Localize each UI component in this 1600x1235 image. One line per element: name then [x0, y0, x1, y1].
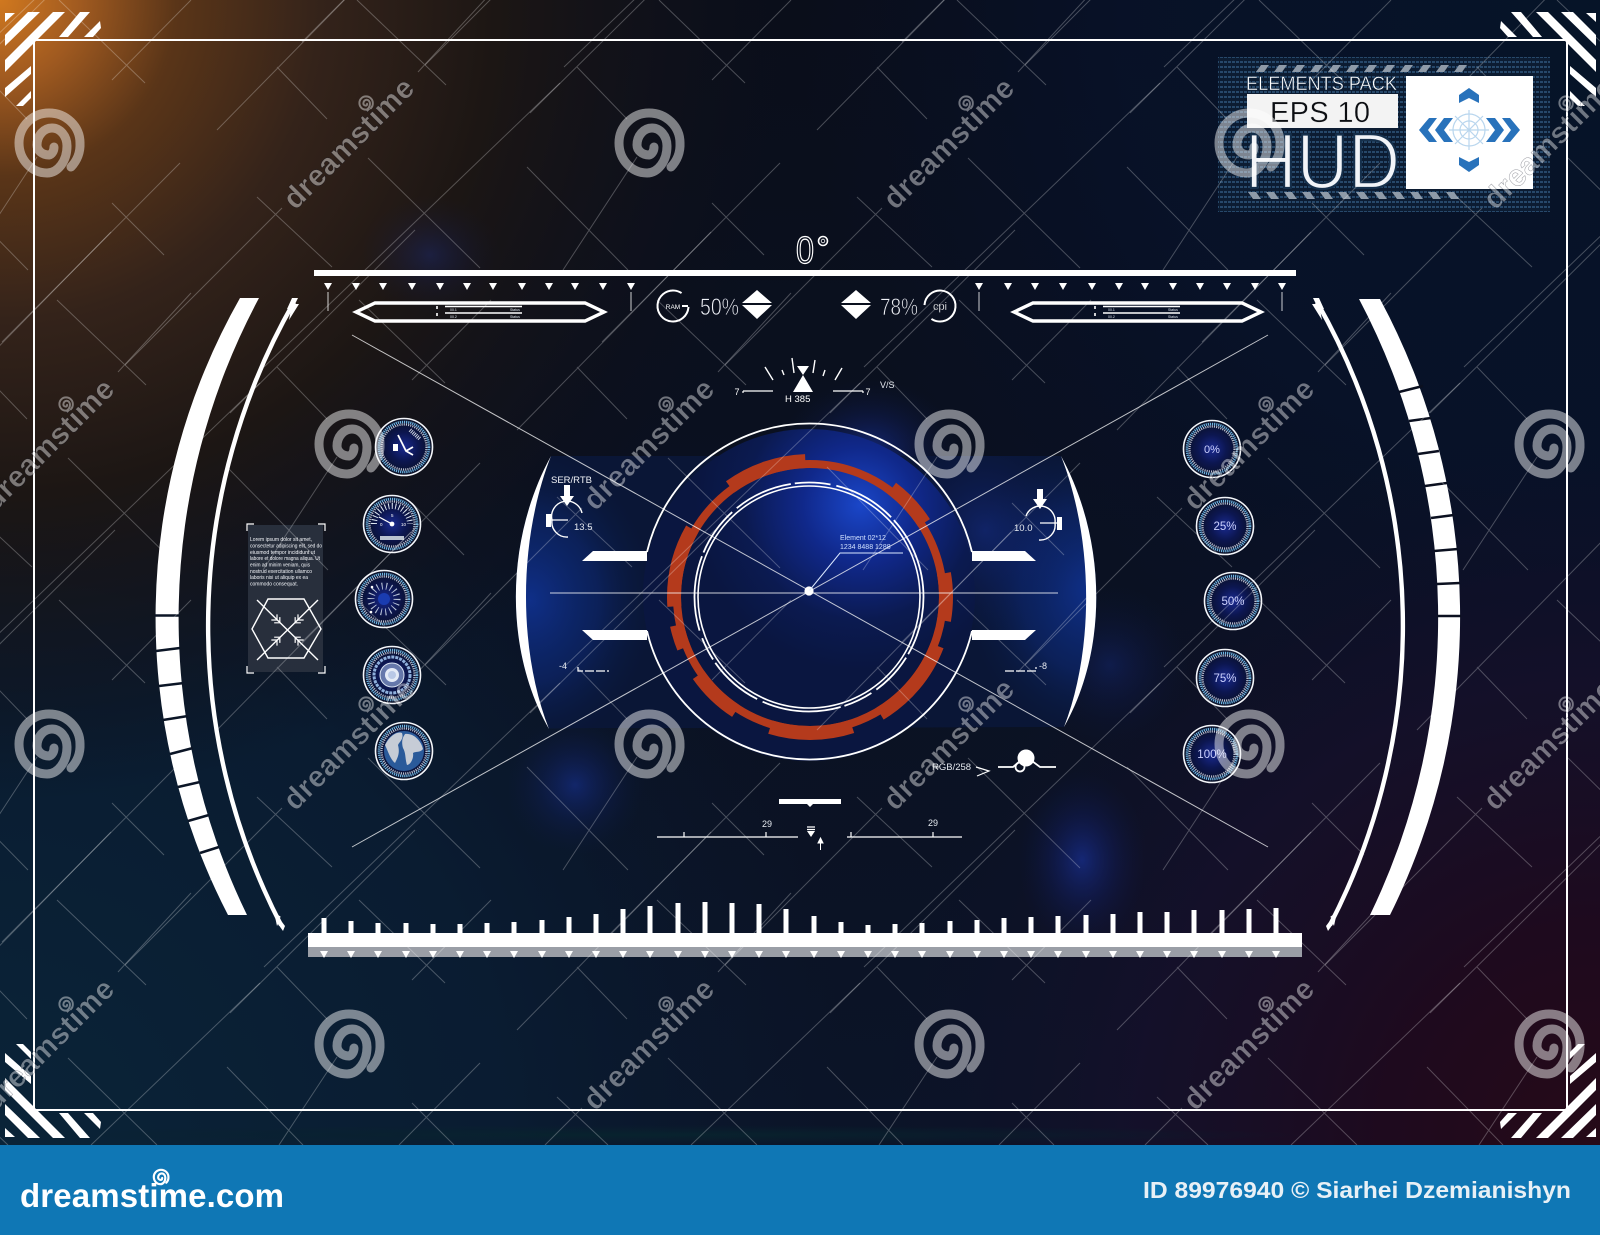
red ring [674, 461, 946, 733]
right gauge 10.0: 10.0 [1014, 523, 1032, 534]
right dial: 100%: 100% [1197, 749, 1227, 761]
left pitch bracket: -4 [559, 661, 567, 671]
heading: heading degree: 0 [796, 230, 814, 272]
left dial: speedometer: 10 [401, 522, 407, 527]
SER/RTB gauge [546, 475, 592, 537]
right dial: 75% [1196, 650, 1254, 706]
lower horizon scale [657, 799, 962, 850]
watermark wordmarks: dreamstime [577, 972, 722, 1117]
icon: RAM diamond [742, 290, 772, 319]
top scale bar [314, 270, 1296, 311]
right dial: 0% [1184, 420, 1240, 478]
lower horizon scale: 29 [928, 818, 938, 828]
right dial: 100% [1184, 726, 1240, 782]
CPU percentage: 78% [880, 294, 918, 321]
left hexagonal readout: Status [510, 308, 520, 312]
EPS label [1247, 94, 1398, 129]
big perspective lines [352, 335, 1268, 847]
left dial: speedometer: 5 [391, 513, 394, 518]
footer credit: ID 89976940 © Siarhei Dzemianishyn [1143, 1177, 1571, 1203]
watermark wordmarks: dreamstime [877, 71, 1022, 216]
panel text: nostrud exercitation ullamco [250, 569, 312, 575]
right hexagonal readout: 00.2 [1108, 315, 1115, 319]
left hexagonal readout: Status [510, 315, 520, 319]
bottom level meter [308, 902, 1302, 958]
corner hatch bottom left [5, 1044, 101, 1138]
CPU gauge [923, 289, 957, 323]
badge: HUD elements pack [1218, 57, 1550, 212]
right hexagonal readout: Status [1168, 315, 1178, 319]
HUD wordmark: HUD [1245, 117, 1400, 205]
RGB indicator [932, 750, 1056, 776]
icon: hexagon crosshair [252, 599, 321, 660]
badge heading: ELEMENTS PACK [1246, 74, 1397, 95]
centre dot [804, 586, 814, 596]
right hexagonal readout [1014, 303, 1261, 321]
icon: CPU diamond [841, 290, 871, 319]
right pitch bracket [1005, 661, 1047, 671]
EPS label: EPS 10 [1270, 97, 1370, 129]
right hexagonal readout: Status [1168, 308, 1178, 312]
vertical speed gauge: H 385 [785, 394, 810, 405]
watermark wordmarks: dreamstime [1177, 372, 1322, 517]
right outer segmented arc [1359, 299, 1461, 915]
left dial: compass [356, 570, 412, 628]
left dial: speedometer [364, 496, 420, 552]
left dial: radar [364, 646, 420, 704]
watermark wordmarks: dreamstime [577, 372, 722, 517]
RAM gauge [656, 289, 690, 323]
watermark wordmarks: dreamstime [277, 71, 422, 216]
panel text: enim ad minim veniam, quis [250, 562, 310, 568]
right dial: 75%: 75% [1213, 673, 1237, 685]
watermark wordmarks: dreamstime [1177, 972, 1322, 1117]
left inner thin arc [208, 298, 299, 931]
RAM gauge: RAM [666, 304, 680, 311]
RAM percentage: 50% [700, 294, 739, 321]
panel text: eiusmod tempor incididunt ut [250, 550, 316, 556]
corner hatch top right [1500, 12, 1596, 106]
RGB indicator: RGB/258 [932, 762, 971, 773]
vertical speed gauge: V/S [880, 380, 895, 390]
corner hatch bottom right [1500, 1044, 1596, 1138]
right hexagonal readout: 00.1 [1108, 308, 1115, 312]
left hexagonal readout: 00.2 [450, 315, 457, 319]
right dial: 25% [1196, 498, 1254, 554]
panel text: labore et dolore magna aliqua. Ut [250, 556, 321, 562]
vertical speed gauge: 7 [734, 387, 740, 397]
outer circle with side bars [582, 424, 1036, 761]
left crescent [516, 456, 551, 729]
right dial: 50% [1204, 572, 1262, 630]
SER/RTB gauge: SER/RTB [551, 475, 592, 486]
element callout: Element 02*12 [840, 535, 886, 542]
CPU gauge: cpi [933, 301, 947, 313]
left hexagonal readout: 00.1 [450, 308, 457, 312]
heading: heading degree [796, 230, 828, 272]
left pitch bracket [559, 661, 609, 671]
horizontal axis [550, 592, 1058, 594]
left hexagonal readout [356, 303, 604, 321]
vertical speed gauge: 7 [865, 387, 871, 397]
right dial: 0%: 0% [1204, 444, 1220, 456]
watermark wordmarks: dreamstime [277, 672, 422, 817]
right gauge 10.0 [1014, 489, 1062, 540]
element callout [809, 535, 903, 591]
lower horizon scale: 29 [762, 819, 772, 829]
vertical speed gauge [734, 358, 895, 405]
element callout: 1234 8488 1288 [840, 544, 891, 551]
right crescent [1061, 456, 1096, 727]
left outer segmented arc [155, 298, 259, 915]
right pitch bracket: -8 [1039, 661, 1047, 671]
footer bar [0, 1145, 1600, 1235]
panel text: consectetur adipiscing elit, sed do [250, 544, 322, 550]
central reticle [550, 424, 1058, 761]
corner hatch top left [5, 12, 101, 106]
right dial: 50%: 50% [1221, 596, 1245, 608]
blue glow behind side crescents [516, 456, 1096, 728]
panel text: laboris nisi ut aliquip ex ea [250, 575, 308, 581]
white inner ring [694, 482, 924, 712]
right inner thin arc [1312, 298, 1403, 931]
panel text: Lorem ipsum dolor sit amet, [250, 537, 312, 543]
footer logo: dreamstime.com [20, 1177, 284, 1214]
right dial: 25%: 25% [1213, 521, 1237, 533]
watermark wordmarks: dreamstime [877, 672, 1022, 817]
panel text [250, 537, 322, 588]
text and crosshair panel [247, 524, 325, 673]
icon: badge target [1406, 76, 1533, 189]
left dial: clock [376, 418, 432, 476]
panel text: commodo consequat. [250, 582, 298, 588]
left dial: globe [376, 722, 432, 780]
left dial: speedometer: 0 [380, 522, 383, 527]
SER/RTB gauge: 13.5 [574, 522, 592, 533]
watermark spirals [19, 113, 1580, 1074]
